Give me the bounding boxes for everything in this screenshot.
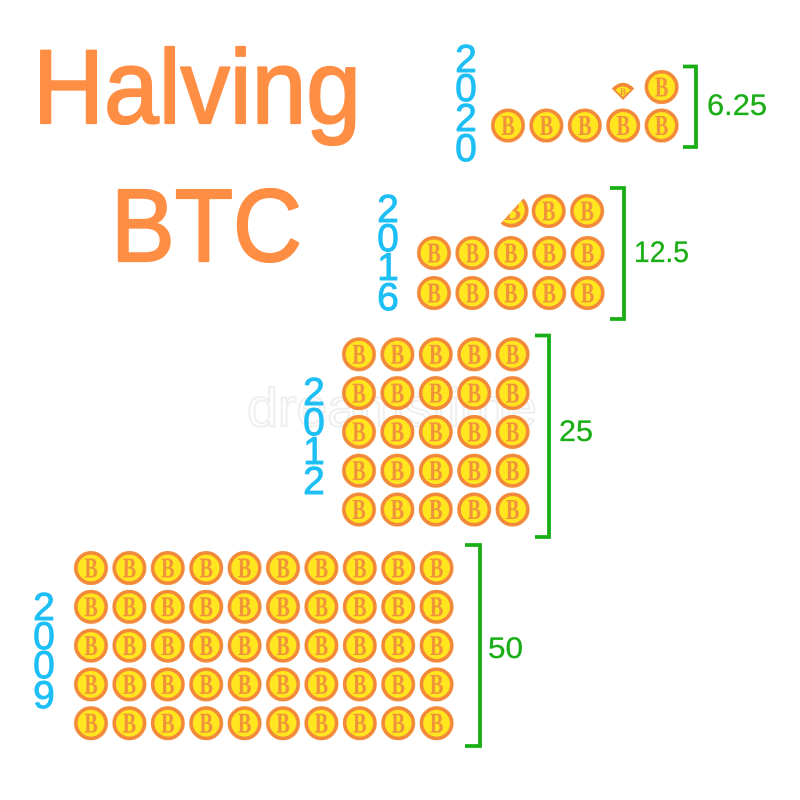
fraction of a coin 2016: B (503, 196, 521, 226)
year label 2012: 1 (303, 430, 325, 473)
fraction of a coin 2020: B (620, 87, 626, 97)
value 50: 50 (488, 632, 523, 665)
coins 2012 grid (340, 335, 532, 529)
coins 2016: bottom row (415, 274, 607, 312)
year label 2009: 2 (33, 586, 55, 629)
year label 2016: 1 (377, 246, 399, 289)
title: Halving: Halving (33, 29, 361, 146)
year label 2012: 2 (303, 371, 325, 414)
year label 2020: 2 (455, 97, 477, 140)
value 12.5: 12.5 (634, 236, 689, 269)
fraction of a coin 2016 (501, 196, 529, 228)
year label 2020: 0 (455, 127, 477, 170)
year label 2009: 0 (33, 644, 55, 687)
coins 2016: middle row (415, 234, 607, 272)
value 6.25: 6.25 (707, 89, 767, 122)
fraction of a coin 2020 (612, 83, 634, 100)
watermark: dreamstime (247, 378, 537, 438)
coins 2009 grid (72, 549, 456, 743)
value 25: 25 (559, 415, 593, 448)
coins 2020: top coin (642, 68, 681, 106)
year label 2016: 0 (377, 217, 399, 260)
year label 2016: 2 (377, 188, 399, 231)
year label 2016 (377, 188, 399, 319)
coins 2020: bottom row (489, 106, 681, 145)
year label 2020: 0 (455, 67, 477, 110)
year label 2009 (33, 586, 55, 717)
year label 2012 (303, 371, 325, 503)
coins 2016: top row (530, 192, 606, 230)
year label 2012: 0 (303, 401, 325, 444)
title: BTC: BTC (111, 168, 302, 283)
bracket 2012 (535, 336, 549, 537)
year label 2009: 9 (33, 674, 55, 717)
year label 2020 (455, 38, 477, 170)
bracket 2016 (610, 188, 624, 319)
year label 2016: 6 (377, 276, 399, 319)
bracket 2020 (683, 66, 696, 147)
year label 2012: 2 (303, 460, 325, 503)
bracket 2009 (465, 545, 480, 746)
year label 2009: 0 (33, 615, 55, 658)
year label 2020: 2 (455, 38, 477, 81)
